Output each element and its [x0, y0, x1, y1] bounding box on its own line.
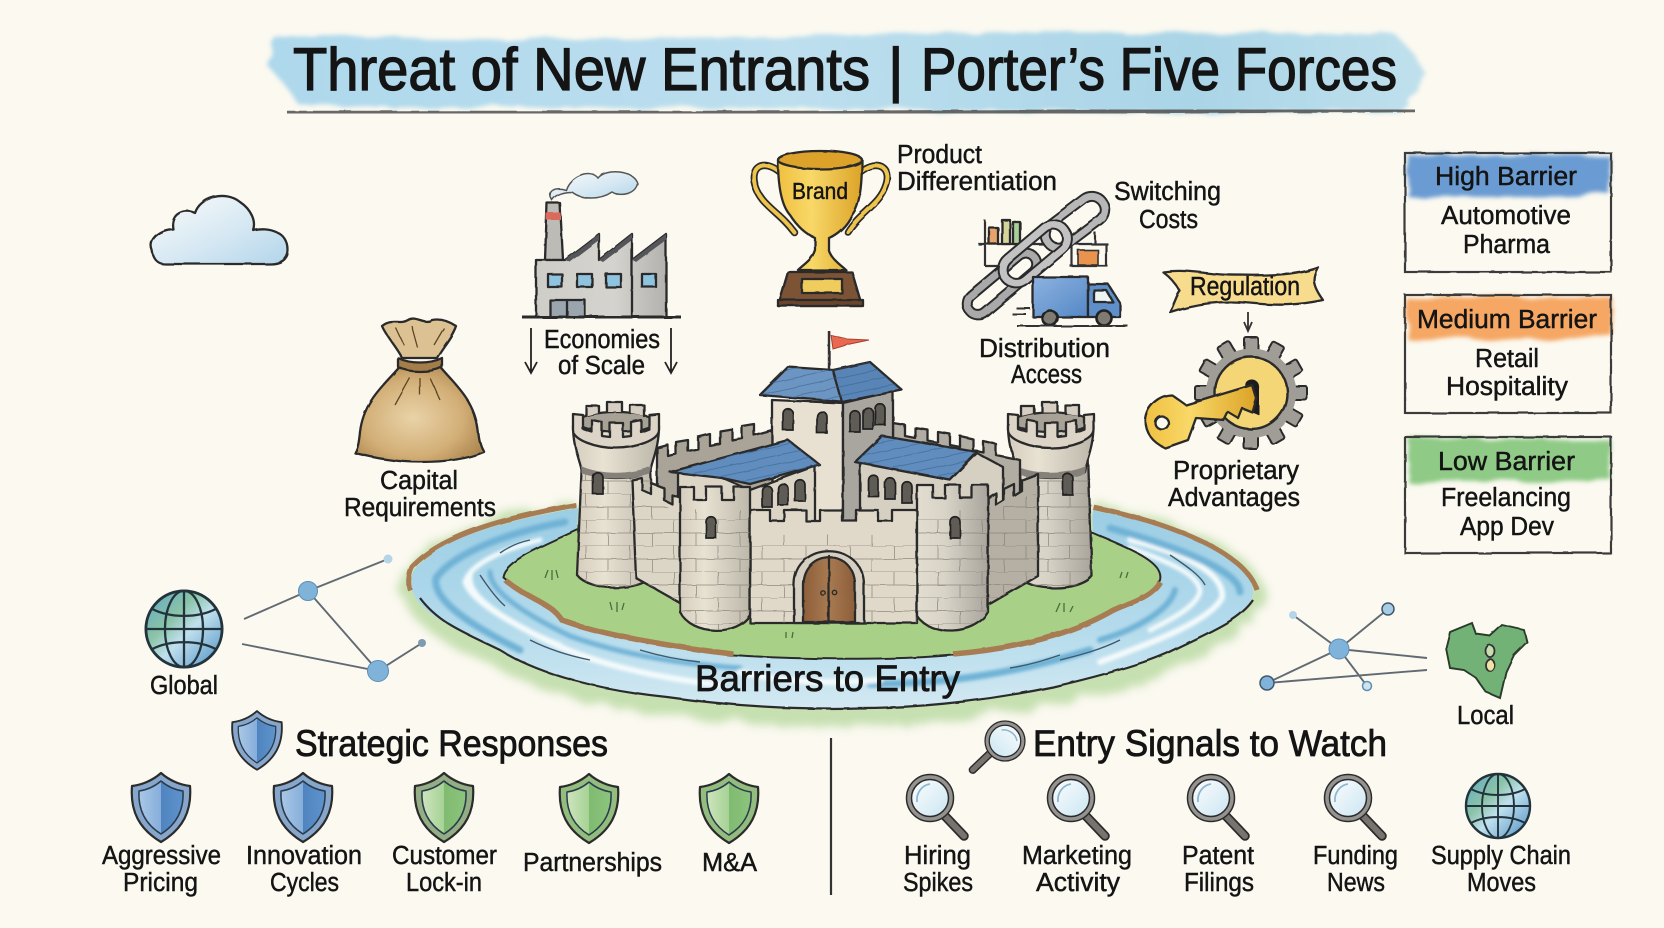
icon: money bag [355, 319, 484, 462]
chain links [963, 191, 1110, 319]
heading icon: magnifier [973, 723, 1023, 770]
item: customer lock-in: Lock-in [406, 869, 482, 897]
label: economies of scale with arrows [525, 326, 677, 380]
heading: entry signals: Entry Signals to Watch [1033, 723, 1387, 764]
item: customer lock-in: Customer [392, 842, 497, 870]
diagram: local network [1260, 603, 1427, 690]
right wing [855, 436, 1003, 525]
water streaks [436, 522, 1240, 685]
item: aggressive pricing: Pricing [123, 869, 198, 897]
card: medium barrier: Retail [1475, 345, 1539, 373]
water ripple marks [480, 540, 1205, 668]
item: aggressive pricing [102, 773, 221, 897]
label: brand on trophy: Brand [792, 178, 848, 204]
label: barriers to entry: Barriers to Entry [695, 658, 960, 699]
item: marketing activity [1022, 777, 1132, 897]
item: supply chain moves: Supply Chain [1431, 842, 1571, 870]
label: distribution access: Access [1011, 361, 1082, 389]
banner label: Regulation [1190, 273, 1300, 301]
arrow: regulation to gear [1244, 312, 1252, 331]
label: switching costs: Costs [1139, 206, 1198, 234]
card: low barrier [1405, 437, 1611, 553]
item: partnerships [523, 774, 662, 877]
watercolor title band [268, 32, 1426, 112]
moat water [411, 508, 1253, 709]
heading icon: shield [232, 711, 282, 770]
label: capital requirements: Capital [380, 467, 458, 495]
icon: shelves, chain and truck [963, 191, 1128, 326]
item: hiring spikes [903, 777, 973, 897]
outer bank [420, 598, 1253, 709]
label: distribution access [979, 335, 1110, 389]
shelves [978, 220, 1108, 266]
label: switching costs: Switching [1114, 178, 1221, 206]
label: capital requirements [344, 467, 496, 522]
island [503, 520, 1160, 659]
panel: barrier levels [1405, 153, 1612, 553]
item: m&a: M&A [702, 849, 757, 877]
item: supply chain moves: Moves [1467, 869, 1536, 897]
item: marketing activity: Marketing [1022, 842, 1132, 870]
label: global: Global [150, 672, 218, 700]
label: local: Local [1457, 702, 1514, 730]
icon: cloud [151, 196, 288, 264]
label: economies of scale with arrows: of Scale [558, 352, 645, 380]
label: product differentiation: Product [897, 141, 982, 169]
icon: factory [522, 172, 681, 317]
banner shape [1163, 267, 1323, 312]
card: medium barrier: Medium Barrier [1417, 306, 1598, 334]
central keep [760, 331, 902, 525]
grass tufts [545, 570, 1128, 638]
illustration: castle [573, 331, 1094, 631]
panel: entry signals to watch [903, 723, 1571, 897]
item: patent filings: Patent [1182, 842, 1254, 870]
left curtain wall [632, 478, 682, 604]
item: funding news [1313, 777, 1398, 897]
item: supply chain moves [1431, 774, 1571, 897]
keep roof [760, 367, 847, 402]
title text: | [888, 36, 904, 103]
panel: strategic responses [102, 711, 758, 897]
item: hiring spikes: Hiring [904, 842, 971, 870]
icon: trophy [754, 151, 887, 306]
card: low barrier: Freelancing [1441, 484, 1571, 512]
item: m&a [700, 774, 758, 877]
card: low barrier: App Dev [1460, 513, 1554, 541]
gate [794, 551, 864, 623]
flag [828, 331, 830, 370]
label: distribution access: Distribution [979, 335, 1110, 363]
label: proprietary advantages: Proprietary [1173, 457, 1299, 485]
grass halo [411, 512, 1253, 717]
diagram: global network [242, 554, 426, 682]
card: medium barrier [1405, 295, 1612, 413]
card: high barrier [1405, 153, 1611, 272]
item: marketing activity: Activity [1036, 869, 1120, 897]
heading: strategic responses: Strategic Responses [295, 723, 608, 764]
card: low barrier: Low Barrier [1438, 448, 1576, 476]
key [1145, 385, 1256, 448]
label: proprietary advantages [1168, 457, 1300, 512]
card: high barrier: High Barrier [1435, 163, 1578, 191]
item: funding news: Funding [1313, 842, 1398, 870]
back left tower [573, 402, 659, 588]
title text: Porter’s Five Forces [921, 36, 1397, 103]
card: high barrier: Pharma [1463, 231, 1551, 259]
icon: global globe [146, 591, 222, 667]
item: hiring spikes: Spikes [903, 869, 973, 897]
card: high barrier: Automotive [1441, 202, 1571, 230]
title text: Threat of New Entrants [293, 36, 870, 103]
card: medium barrier: Hospitality [1446, 373, 1568, 401]
right curtain wall [988, 474, 1038, 605]
truck [1012, 277, 1128, 326]
gear [1195, 337, 1307, 449]
icon: key in gear [1145, 337, 1307, 449]
item: innovation cycles [246, 773, 362, 897]
back walls [657, 424, 772, 510]
item: innovation cycles: Innovation [246, 842, 362, 870]
brown banks [409, 505, 1257, 590]
island brown shore [505, 580, 1160, 654]
title underline [287, 110, 1415, 113]
item: innovation cycles: Cycles [270, 869, 339, 897]
item: partnerships: Partnerships [523, 849, 662, 877]
label: product differentiation [897, 141, 1057, 196]
label: capital requirements: Requirements [344, 494, 496, 522]
title text [293, 36, 1397, 103]
right front tower [917, 485, 988, 631]
title banner [268, 32, 1426, 113]
label: proprietary advantages: Advantages [1168, 484, 1300, 512]
icon: local map [1446, 623, 1527, 698]
illustration: moat and island [409, 505, 1257, 717]
item: patent filings [1182, 777, 1254, 897]
item: funding news: News [1327, 869, 1385, 897]
regulation banner [1163, 267, 1323, 312]
item: customer lock-in [392, 773, 497, 897]
left front tower [680, 487, 750, 630]
back right tower [1008, 402, 1094, 588]
item: aggressive pricing: Aggressive [102, 842, 221, 870]
label: switching costs [1114, 178, 1221, 234]
front wall [750, 510, 917, 623]
left wing [670, 440, 820, 525]
label: economies of scale with arrows: Economies [544, 326, 660, 354]
label: product differentiation: Differentiation [897, 168, 1057, 196]
item: patent filings: Filings [1184, 869, 1254, 897]
